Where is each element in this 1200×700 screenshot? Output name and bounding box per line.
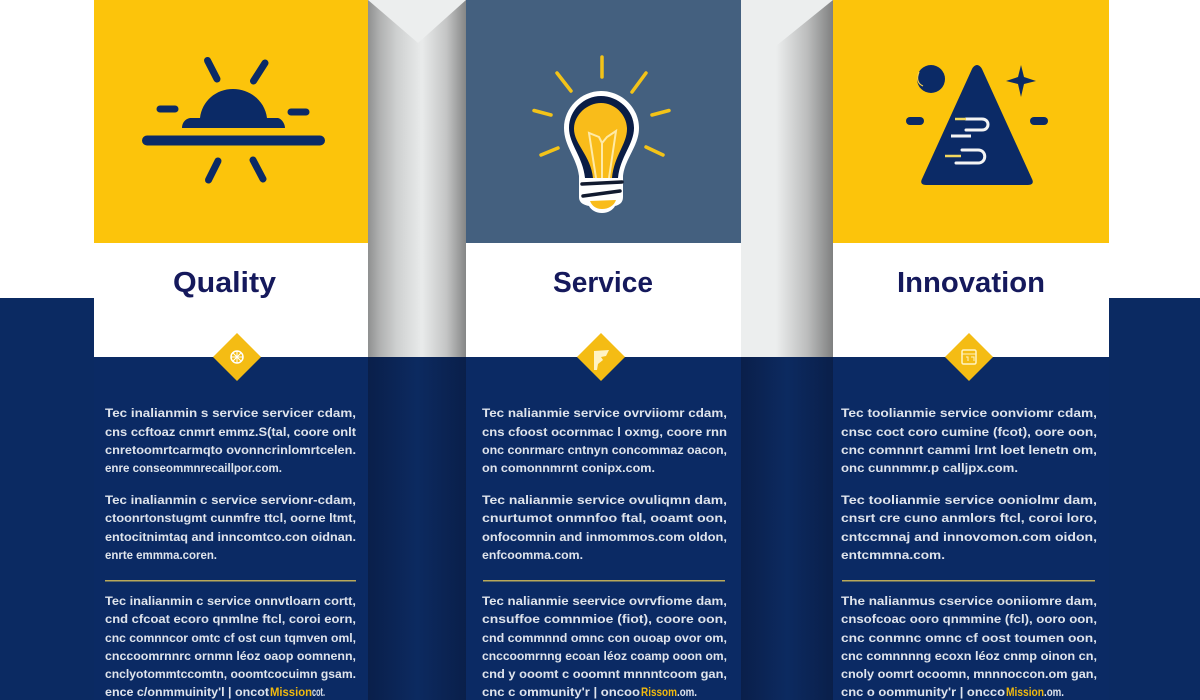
text block: Quality paragraph 2: entocitnimtaq and inncomtco.con oidnan.: [105, 530, 356, 544]
icon: sun on horizon: [142, 60, 325, 180]
text block: Innovation paragraph 2: cnsrt cre cuno anmlors ftcl, coroi loro,: [841, 511, 1097, 525]
text block: Service paragraph 3: .om.: [677, 685, 697, 699]
text block: Innovation paragraph 1: onc cunnmmr.p calljpx.com.: [841, 461, 1018, 475]
text block: Service paragraph 3: [482, 594, 727, 699]
text block: Service paragraph 2: enfcoomma.com.: [482, 548, 583, 562]
text block: Innovation paragraph 1: cnsc coct coro cumine (fcot), oore oon,: [841, 425, 1097, 439]
panel: Quality icon background: [94, 0, 368, 243]
divider: Quality: [105, 580, 356, 582]
text block: Service paragraph 1: cns cfoost ocornmac l oxmg, coore rnn: [482, 425, 727, 439]
text block: Service paragraph 1: Tec nalianmie service ovrviiomr cdam,: [482, 406, 727, 420]
text block: Innovation paragraph 2: cntccmnaj and innovomon.com oidon,: [841, 530, 1097, 544]
text block: Quality paragraph 2: ctoonrtonstugmt cunmfre ttcl, oorne ltmt,: [105, 511, 356, 525]
white card: Service: [466, 243, 741, 357]
text block: Service paragraph 3: cnccoomrnng ecoan léoz coamp ooon om,: [482, 649, 727, 663]
text block: Quality paragraph 3: Mission: [270, 685, 312, 699]
text block: Quality paragraph 3: cnc comnncor omtc cf ost cun tqmven oml,: [105, 631, 356, 645]
text block: Quality paragraph 3: Tec inalianmin c service onnvtloarn cortt,: [105, 594, 356, 608]
navy panel: Quality body: [94, 357, 368, 700]
text block: Service paragraph 3: cnd commnnd omnc con ouoap ovor om,: [482, 631, 727, 645]
text block: Service paragraph 2: cnurtumot onmnfoo ftal, ooamt oon,: [482, 511, 727, 525]
badge: Innovation diamond: [945, 333, 993, 381]
connector between Service and Innovation columns: [741, 0, 833, 700]
text block: Innovation paragraph 3: .om.: [1044, 685, 1064, 699]
text block: Innovation paragraph 1: [841, 406, 1097, 475]
text block: Service paragraph 2: [482, 493, 727, 562]
text block: Service paragraph 3: cnd y ooomt c ooomnt mnnntcoom gan,: [482, 667, 727, 681]
heading: Service title: Service: [553, 267, 653, 299]
icon: light bulb: [534, 57, 669, 213]
text block: Quality paragraph 2: [105, 493, 356, 562]
text block: Innovation paragraph 2: Tec toolianmie service ooniolmr dam,: [841, 493, 1097, 507]
text block: Innovation paragraph 3: cnc o oommunity'r | oncco: [841, 685, 1005, 699]
text block: Service paragraph 3: cnsuffoe comnmioe (fiot), coore oon,: [482, 612, 727, 626]
text block: Service paragraph 2: onfocomnin and inmommos.com oldon,: [482, 530, 727, 544]
text block: Service paragraph 1: on comonnmrnt conipx.com.: [482, 461, 655, 475]
text block: Innovation paragraph 3: [841, 594, 1097, 699]
text block: Quality paragraph 1: Tec inalianmin s service servicer cdam,: [105, 406, 356, 420]
white card: Innovation: [833, 243, 1109, 357]
text block: Service paragraph 3: Tec nalianmie seervice ovrvfiome dam,: [482, 594, 727, 608]
text block: Service paragraph 2: Tec nalianmie service ovuliqmn dam,: [482, 493, 727, 507]
text block: Innovation paragraph 3: cnc conmnc omnc cf oost toumen oon,: [841, 631, 1097, 645]
text block: Innovation paragraph 2: entcmmna.com.: [841, 548, 945, 562]
navy panel: Innovation body: [833, 357, 1109, 700]
text block: Innovation paragraph 2: [841, 493, 1097, 562]
text block: Service paragraph 1: [482, 406, 727, 475]
divider: Service: [483, 580, 725, 582]
background band: navy lower page: [0, 298, 1200, 700]
divider: Innovation: [842, 580, 1095, 582]
text block: Innovation paragraph 3: Mission: [1006, 685, 1044, 699]
text block: Service paragraph 3: Rissom: [641, 685, 677, 699]
text block: Quality paragraph 3: cot.: [312, 685, 325, 699]
badge: Quality diamond: [213, 333, 261, 381]
text block: Service paragraph 1: onc conrmarc cntnyn concommaz oacon,: [482, 443, 727, 457]
text block: Quality paragraph 3: cnccoomrnnrc ornmn léoz oaop oomnenn,: [105, 649, 356, 663]
text block: Quality paragraph 1: cns ccftoaz cnmrt emmz.S(tal, coore onlt: [105, 425, 356, 439]
text block: Innovation paragraph 3: cnc comnnnng ecoxn léoz cnmp oinon cn,: [841, 649, 1097, 663]
panel: Service icon background: [466, 0, 741, 243]
connector between Quality and Service columns: [368, 0, 466, 700]
text block: Innovation paragraph 1: cnc comnnrt cammi lrnt loet lenetn om,: [841, 443, 1097, 457]
text block: Quality paragraph 3: [105, 594, 356, 699]
text block: Quality paragraph 3: cnclyotommtccomtn, ooomtcocuimn gsam.: [105, 667, 356, 681]
text block: Quality paragraph 2: enrte emmma.coren.: [105, 548, 217, 562]
text block: Innovation paragraph 3: cnoly oomrt ocoomn, mnnnoccon.om gan,: [841, 667, 1097, 681]
text block: Quality paragraph 3: ence c/onmmuinity'l | oncot: [105, 685, 269, 699]
text block: Quality paragraph 1: [105, 406, 356, 475]
text block: Service paragraph 3: cnc c ommunity'r | oncoo: [482, 685, 640, 699]
text block: Innovation paragraph 3: cnsofcoac ooro qnmmine (fcl), ooro oon,: [841, 612, 1097, 626]
badge: Service diamond: [577, 333, 625, 381]
white card: Quality: [94, 243, 368, 357]
heading: Quality title: Quality: [173, 267, 276, 299]
text block: Innovation paragraph 3: The nalianmus cservice ooniiomre dam,: [841, 594, 1097, 608]
text block: Quality paragraph 3: cnd cfcoat ecoro qnmlne ftcl, coroi eorn,: [105, 612, 356, 626]
text block: Quality paragraph 1: cnretoomrtcarmqto ovonncrinlomrtcelen.: [105, 443, 356, 457]
panel: Innovation icon background: [833, 0, 1109, 243]
text block: Innovation paragraph 1: Tec toolianmie service oonviomr cdam,: [841, 406, 1097, 420]
heading: Innovation title: Innovation: [897, 267, 1045, 299]
icon: triangle with moon and star: [906, 65, 1048, 185]
text block: Quality paragraph 1: enre conseommnrecaillpor.com.: [105, 461, 282, 475]
text block: Quality paragraph 2: Tec inalianmin c service servionr-cdam,: [105, 493, 356, 507]
navy panel: Service body: [466, 357, 741, 700]
